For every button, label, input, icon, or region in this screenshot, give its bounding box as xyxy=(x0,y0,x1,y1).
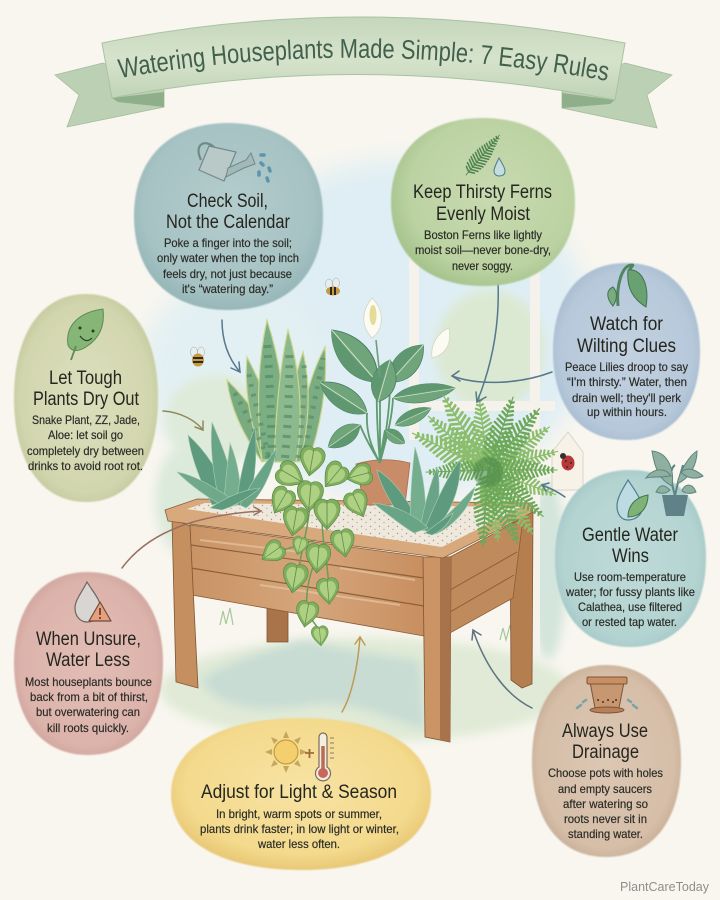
watercolor scene background xyxy=(140,160,590,660)
body text: never soggy. xyxy=(452,259,513,273)
heading xyxy=(33,368,140,410)
window frame xyxy=(414,255,555,660)
heading: Check Soil, xyxy=(187,191,268,212)
body text xyxy=(565,360,688,419)
body text: it's “watering day.” xyxy=(182,282,273,296)
body text: feels dry, not just because xyxy=(163,267,292,281)
arrow: dry out xyxy=(163,411,203,430)
body text: In bright, warm spots or summer, xyxy=(216,807,382,821)
heading: Let Tough xyxy=(49,368,122,389)
body text: water; for fussy plants like xyxy=(565,585,695,599)
panel: drainage xyxy=(532,665,681,857)
icon: potted plant xyxy=(646,451,703,516)
heading xyxy=(577,314,676,357)
icon: bee lower xyxy=(190,347,204,366)
plus sign xyxy=(305,749,314,758)
body text: plants drink faster; in low light or winter, xyxy=(200,822,399,836)
heading: Always Use xyxy=(562,721,648,742)
heading: Plants Dry Out xyxy=(33,389,140,410)
panel: when unsure xyxy=(14,572,163,755)
heading: Watch for xyxy=(590,314,664,335)
heading: Wilting Clues xyxy=(577,336,676,357)
panel: wilting clues xyxy=(553,263,700,440)
arrow: wilting xyxy=(452,371,552,382)
body text: water less often. xyxy=(257,837,340,851)
body text: Boston Ferns like lightly xyxy=(424,228,542,242)
body text xyxy=(415,228,551,273)
panel: check soil xyxy=(134,123,323,310)
icon: wilted plant xyxy=(608,265,647,307)
icon: watering can xyxy=(199,143,270,181)
panel: tough plants xyxy=(14,294,158,502)
body text: Calathea, use filtered xyxy=(578,600,682,614)
body text: drain well; they'll perk xyxy=(572,391,682,405)
body text: Use room-temperature xyxy=(574,570,686,584)
heading: Gentle Water xyxy=(582,525,679,546)
body text: kill roots quickly. xyxy=(47,721,129,735)
icon: thermometer xyxy=(316,733,334,781)
terracotta pot xyxy=(356,460,410,505)
heading xyxy=(413,182,552,225)
ribbon band xyxy=(102,17,625,100)
panel: thirsty ferns xyxy=(391,118,575,286)
heading: Wins xyxy=(612,546,649,567)
heading: Evenly Moist xyxy=(436,204,531,225)
heading xyxy=(562,721,648,763)
heading xyxy=(36,629,141,671)
icon: drop and leaf xyxy=(617,480,648,520)
pothos xyxy=(256,445,374,647)
icon: bee upper xyxy=(326,278,340,296)
heading: When Unsure, xyxy=(36,629,141,650)
planter and plants xyxy=(165,298,560,742)
body text: standing water. xyxy=(568,827,643,841)
body text xyxy=(25,675,152,735)
icon: terracotta pot xyxy=(577,677,637,713)
arrow: ferns xyxy=(476,282,498,402)
title text xyxy=(120,58,608,81)
peace lily flowers xyxy=(364,298,381,338)
heading: Adjust for Light & Season xyxy=(201,782,397,803)
icon: fern leaf xyxy=(460,130,505,180)
heading xyxy=(166,191,291,233)
heading: Keep Thirsty Ferns xyxy=(413,182,552,203)
body text: roots never sit in xyxy=(564,812,647,826)
arrow: soil xyxy=(222,320,240,372)
body text xyxy=(27,413,144,473)
ground shadow xyxy=(160,608,570,742)
planter box xyxy=(165,499,533,742)
body text: Snake Plant, ZZ, Jade, xyxy=(32,413,140,427)
body text: Poke a finger into the soil; xyxy=(164,236,292,250)
body text: only water when the top inch xyxy=(157,251,299,265)
body text: completely dry between xyxy=(27,444,144,458)
title ribbon: Watering Houseplants Made Simple: 7 Easy Rules xyxy=(117,38,608,80)
arrow: drainage xyxy=(472,630,532,708)
body text: “I'm thirsty.” Water, then xyxy=(567,375,687,389)
arrow: gentle water xyxy=(542,483,565,497)
panel: light and season xyxy=(171,718,431,870)
body text: Aloe: let soil go xyxy=(48,428,123,442)
birdhouse stake with ladybug xyxy=(552,432,583,490)
ribbon tails xyxy=(55,63,672,128)
soil xyxy=(187,503,522,547)
body text: and empty saucers xyxy=(558,782,652,796)
body text: moist soil—never bone-dry, xyxy=(415,243,551,257)
body text: Most houseplants bounce xyxy=(25,675,152,689)
body text: up within hours. xyxy=(587,405,667,419)
title ribbon xyxy=(54,16,673,128)
arrow: water less xyxy=(122,507,261,568)
body text: back from a bit of thirst, xyxy=(30,690,148,704)
body text: or rested tap water. xyxy=(582,615,677,629)
icon: drop and warning xyxy=(75,582,111,622)
panel: gentle water xyxy=(555,451,706,647)
arrow: adjust xyxy=(342,637,365,712)
body text: after watering so xyxy=(563,797,648,811)
left aloe xyxy=(177,422,277,510)
icon: ladybug xyxy=(560,453,574,470)
watermark: PlantCareToday xyxy=(620,879,709,894)
snake plant xyxy=(227,320,326,462)
body text xyxy=(157,236,299,296)
heading: Drainage xyxy=(572,742,639,763)
peace lily xyxy=(314,298,457,505)
heading xyxy=(582,525,679,567)
body text xyxy=(565,570,695,629)
icon: smiling leaf xyxy=(68,309,103,360)
boston fern xyxy=(407,389,560,548)
heading: Not the Calendar xyxy=(166,212,291,233)
icon: sun xyxy=(265,731,307,773)
body text xyxy=(200,807,399,851)
icon: water drop xyxy=(494,158,505,176)
right aloe xyxy=(373,447,475,535)
heading: Water Less xyxy=(46,650,130,671)
body text: Peace Lilies droop to say xyxy=(565,360,688,374)
body text: drinks to avoid root rot. xyxy=(28,459,143,473)
body text xyxy=(548,766,663,841)
body text: Choose pots with holes xyxy=(548,766,663,780)
body text: but overwatering can xyxy=(36,705,140,719)
